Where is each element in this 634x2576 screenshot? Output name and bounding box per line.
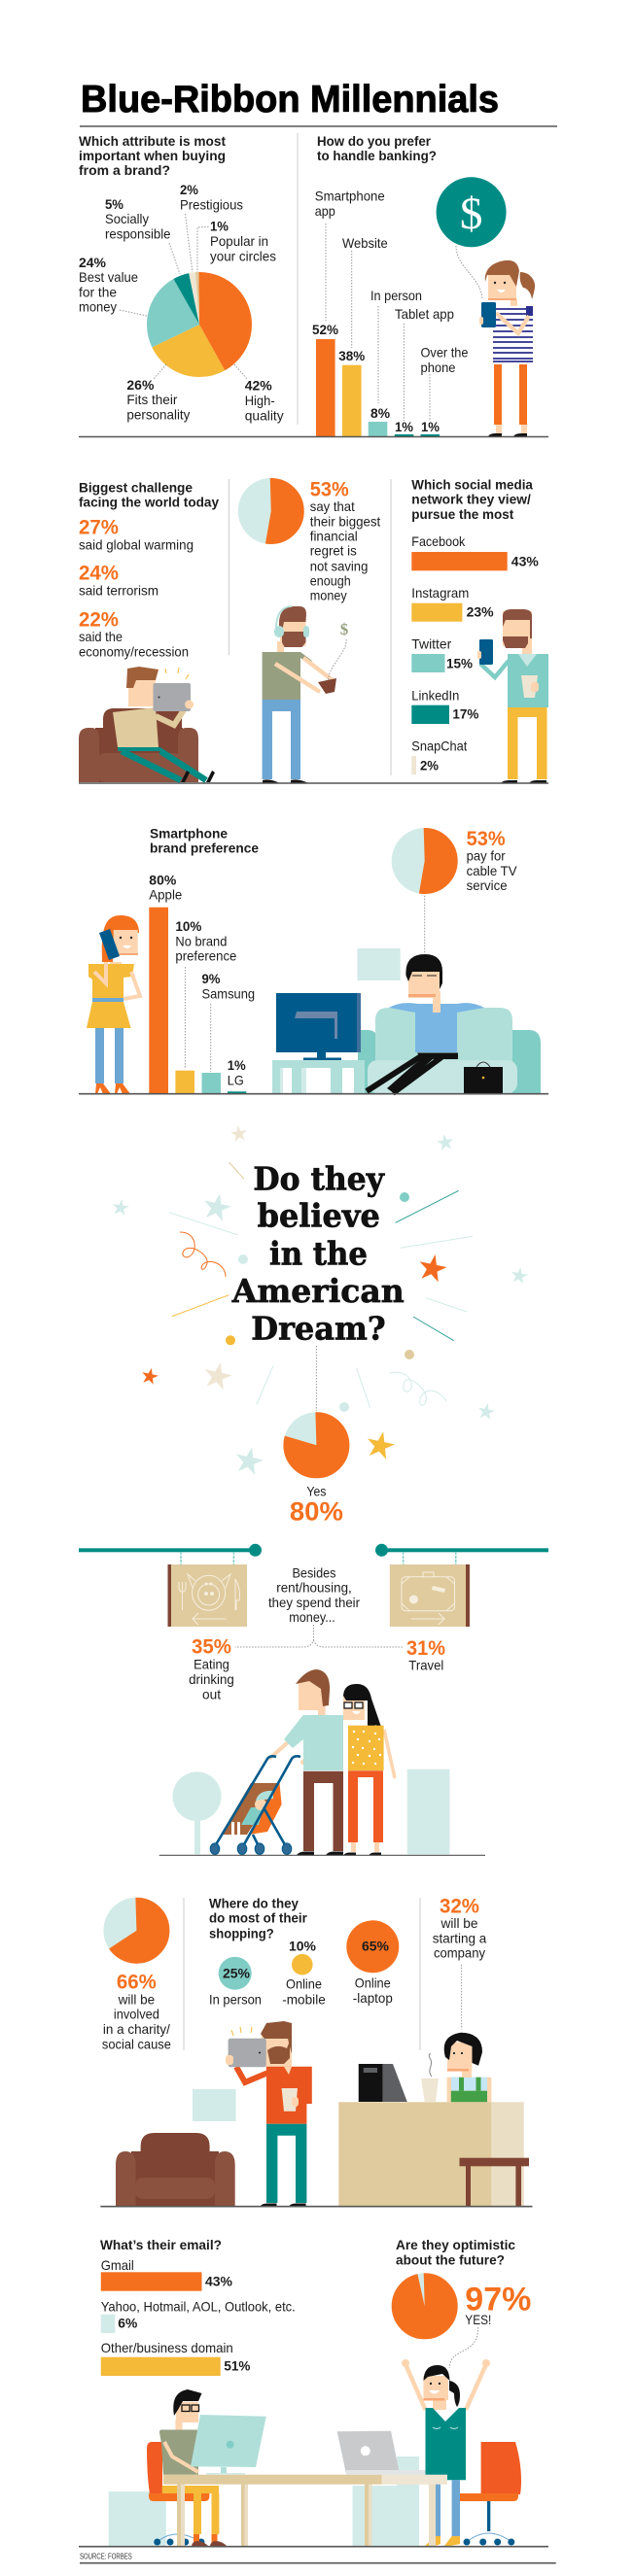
pie labels: Best value xyxy=(79,269,138,285)
text block: charity: social cause xyxy=(102,2036,171,2051)
text block: regret: their biggest xyxy=(310,514,380,530)
heading: American Dream: believe xyxy=(258,1197,380,1235)
bar chart: banking: phone xyxy=(420,360,456,375)
text block: charity: will be xyxy=(118,1991,155,2007)
pie labels: quality xyxy=(245,407,284,423)
heading: American Dream: American xyxy=(231,1272,405,1310)
panel: charity xyxy=(102,1898,171,2051)
figure: girl on phone xyxy=(87,915,140,1094)
bar chart: banking: Over the xyxy=(420,345,469,361)
panel: starting a company: starting a xyxy=(433,1930,486,1945)
bar chart: email: Other/business domain xyxy=(101,2340,233,2355)
heading: smartphone brand: Smartphone xyxy=(150,825,228,841)
label: 97% yes xyxy=(449,2281,531,2368)
pie labels: 1% xyxy=(210,219,229,234)
pie chart: 66% charity xyxy=(103,1898,169,1964)
bubble chart: shopping: In person xyxy=(209,1991,262,2007)
bar chart: banking: 8% xyxy=(370,405,391,421)
heading: brand attributes: Which attribute is most xyxy=(79,133,226,149)
bar chart: banking xyxy=(312,189,469,436)
label: 80% yes: Yes xyxy=(306,1483,326,1498)
pie labels: for the xyxy=(79,284,117,299)
bubble chart: shopping xyxy=(209,1920,399,2007)
panel: shopping xyxy=(116,1896,529,2208)
pie labels: Prestigious xyxy=(180,197,243,213)
icon: travel sign xyxy=(390,1564,470,1627)
panel: starting a company: company xyxy=(434,1945,485,1961)
bar chart: social networks: 2% xyxy=(420,758,440,773)
bar chart: smartphone brands: Samsung xyxy=(202,986,255,1002)
bar chart: smartphone brands: LG xyxy=(228,1073,244,1088)
pie labels: your circles xyxy=(210,249,276,264)
bar chart: smartphone brands: 10% xyxy=(175,918,202,934)
heading: American Dream: Dream? xyxy=(251,1309,386,1347)
label: 97% yes: YES! xyxy=(465,2312,491,2327)
bar chart: social networks xyxy=(411,533,539,774)
text block: cable: 53% xyxy=(467,828,506,850)
bubble chart: shopping: 25% xyxy=(223,1965,251,1980)
heading: social media xyxy=(411,476,533,522)
sign rods xyxy=(79,1544,548,1564)
text block: challenges: 24% xyxy=(79,563,119,585)
bar chart: social networks: 43% xyxy=(511,553,539,568)
text block: regret: enough xyxy=(310,573,351,589)
heading: optimism xyxy=(396,2237,515,2267)
icon: eating sign xyxy=(167,1564,247,1627)
pie labels: responsible xyxy=(105,225,171,241)
bubble chart: shopping: Online xyxy=(286,1976,322,1992)
heading: smartphone brand xyxy=(150,825,259,856)
text block: cable: pay for xyxy=(467,848,506,864)
pie chart: 53% regret xyxy=(238,478,304,544)
text block: challenges: 27% xyxy=(79,516,119,538)
pie labels: High- xyxy=(245,393,275,408)
bar chart: social networks: 23% xyxy=(467,603,494,619)
figure: man with headphones and wallet: $ xyxy=(340,620,349,638)
text block: spending: rent/housing, xyxy=(276,1579,352,1595)
heading: American Dream: Do they xyxy=(253,1159,385,1197)
bar chart: smartphone brands: 9% xyxy=(202,971,221,986)
pie labels: Fits their xyxy=(126,392,178,407)
bar chart: banking: In person xyxy=(370,288,422,303)
panel: starting a company: will be xyxy=(440,1915,478,1931)
figure: man with tablet and coffee xyxy=(226,2021,312,2206)
text block: regret: money xyxy=(310,588,347,603)
title: Blue-Ribbon Millennials xyxy=(81,79,499,120)
text block: charity: 66% xyxy=(117,1972,157,1994)
text block: spending: Travel xyxy=(408,1658,443,1673)
text block: challenges xyxy=(79,480,219,659)
text block: spending: out xyxy=(202,1686,221,1701)
figure: man on armchair with tablet xyxy=(79,667,215,782)
pie labels: Socially xyxy=(105,211,149,226)
pie labels: 2% xyxy=(180,182,199,197)
text block: charity: involved xyxy=(114,2006,159,2021)
pie labels: 42% xyxy=(245,378,272,394)
text block: spending: Eating xyxy=(194,1657,229,1672)
heading: brand attributes xyxy=(79,133,226,178)
heading: optimism: Are they optimistic xyxy=(396,2237,515,2252)
text block: cable: service xyxy=(467,877,508,893)
text block: regret: say that xyxy=(310,498,355,514)
bar chart: social networks: SnapChat xyxy=(411,738,467,753)
heading: banking: How do you prefer xyxy=(317,133,432,149)
figure: man with headphones and wallet xyxy=(263,606,349,783)
figure: counter with barista xyxy=(338,2033,529,2207)
bar chart: banking: app xyxy=(315,203,335,219)
pie labels: Popular in xyxy=(210,233,268,249)
bar chart: social networks: LinkedIn xyxy=(411,688,459,704)
pie labels xyxy=(79,182,284,423)
panel: financial regret xyxy=(238,478,380,783)
bar chart: social networks: Twitter xyxy=(411,636,452,652)
confetti decoration xyxy=(112,1124,529,1476)
heading: social media: pursue the most xyxy=(411,506,514,522)
panel: social media xyxy=(411,476,548,783)
text block: spending xyxy=(189,1564,445,1701)
panel: biggest challenge xyxy=(79,480,219,782)
figure: man on sofa with TV xyxy=(272,954,541,1094)
figure: desk xyxy=(163,2456,447,2546)
figure: cheering woman with laptop xyxy=(337,2359,490,2546)
icon: dollar balloon: $ xyxy=(460,189,482,239)
figure: armchair xyxy=(116,2133,235,2208)
bar chart: banking: Smartphone xyxy=(315,189,385,204)
heading: social media: Which social media xyxy=(411,476,533,492)
text block: cable xyxy=(467,828,517,893)
panel: banking preference xyxy=(312,133,535,436)
bar chart: banking: 1% xyxy=(421,419,440,434)
text block: regret: financial xyxy=(310,529,358,544)
heading: shopping: do most of their xyxy=(209,1910,307,1926)
pie labels: money xyxy=(79,299,117,315)
text block: spending: 31% xyxy=(406,1637,445,1660)
panel: optimism xyxy=(337,2237,531,2546)
figure: desk top and office chair xyxy=(381,2442,521,2546)
bar chart: social networks: Instagram xyxy=(411,585,469,601)
panel: brand attributes xyxy=(79,133,284,423)
text block: regret: 53% xyxy=(310,479,349,501)
bubble chart: shopping: 65% xyxy=(362,1939,390,1954)
figure: family with stroller xyxy=(173,1669,449,1856)
bar chart: smartphone brands: Apple xyxy=(149,887,182,903)
bubble chart: shopping: Online xyxy=(355,1975,391,1991)
text block: challenges: economy/recession xyxy=(79,643,189,659)
bar chart: banking: 52% xyxy=(312,322,339,337)
text block: challenges: 22% xyxy=(79,608,119,631)
heading: smartphone brand: brand preference xyxy=(150,841,259,856)
bar chart: email: 6% xyxy=(118,2316,138,2331)
text block: challenges: said terrorism xyxy=(79,583,158,599)
bar chart: smartphone brands: No brand xyxy=(175,933,227,948)
bar chart: email: Yahoo, Hotmail, AOL, Outlook, etc. xyxy=(101,2299,296,2315)
text block: regret: not saving xyxy=(310,558,368,573)
bar chart: email: What’s their email? xyxy=(100,2237,222,2252)
bar chart: email: Gmail xyxy=(101,2257,134,2273)
bar chart: banking: 38% xyxy=(338,348,366,363)
bar chart: social networks: 15% xyxy=(446,655,474,670)
text block: cable: cable TV xyxy=(467,863,517,878)
panel: cable TV xyxy=(272,828,541,1094)
bar chart: smartphone brands xyxy=(149,872,255,1094)
bar chart: smartphone brands: 80% xyxy=(149,872,177,887)
heading: banking xyxy=(317,133,437,163)
bubble chart: shopping: 10% xyxy=(289,1939,317,1954)
pie chart: 97% yes xyxy=(392,2273,458,2339)
figure: man at desk with monitor xyxy=(109,2389,266,2546)
bar chart: social networks: Facebook xyxy=(411,533,466,549)
bar chart: banking: 1% xyxy=(395,419,414,434)
pie chart: brand attributes xyxy=(173,298,226,351)
text block: spending: Besides xyxy=(292,1564,336,1580)
text block: challenges: facing the world today xyxy=(79,495,219,510)
bar chart: social networks: 17% xyxy=(452,706,479,722)
label: 97% yes: 97% xyxy=(465,2281,531,2318)
text block: charity xyxy=(102,1972,171,2051)
source note: SOURCE: FORBES xyxy=(80,2553,132,2561)
text block: challenges: Biggest challenge xyxy=(79,480,193,496)
panel: starting a company: 32% xyxy=(440,1895,479,1917)
pie labels: 24% xyxy=(79,255,107,270)
text block: regret: regret is xyxy=(310,543,357,559)
bar chart: email: 43% xyxy=(205,2273,233,2288)
heading: shopping: Where do they xyxy=(209,1896,299,1911)
bar chart: email xyxy=(100,2237,296,2376)
figure: girl with phone xyxy=(479,260,535,436)
pie labels: 5% xyxy=(105,196,124,212)
text block: spending: money... xyxy=(289,1609,335,1625)
panel: American Dream xyxy=(112,1124,529,1526)
bubble chart: shopping: -laptop xyxy=(353,1990,393,2006)
text block: regret xyxy=(310,479,380,603)
pie chart: 80% yes xyxy=(283,1412,349,1478)
text block: charity: in a charity/ xyxy=(103,2021,170,2037)
heading: American Dream: in the xyxy=(269,1235,368,1273)
panel: spending xyxy=(79,1544,548,1856)
bar chart: banking: Tablet app xyxy=(395,306,454,322)
panel: starting a company xyxy=(433,1895,486,2029)
label: 80% yes xyxy=(290,1483,343,1526)
bubble chart: shopping: -mobile xyxy=(282,1991,326,2007)
heading: American Dream xyxy=(231,1159,405,1347)
pie labels: 26% xyxy=(126,377,155,393)
label: 80% yes: 80% xyxy=(290,1496,343,1526)
icon: dollar balloon xyxy=(437,177,507,298)
text block: challenges: said global warming xyxy=(79,536,194,552)
heading: shopping xyxy=(209,1896,307,1941)
text block: spending: 35% xyxy=(192,1636,231,1659)
heading: banking: to handle banking? xyxy=(317,148,437,163)
bar chart: smartphone brands: 1% xyxy=(228,1057,246,1073)
panel: email xyxy=(100,2237,447,2546)
heading: brand attributes: from a brand? xyxy=(79,162,170,178)
heading: shopping: shopping? xyxy=(209,1925,274,1941)
heading: brand attributes: important when buying xyxy=(79,148,226,163)
bar chart: email: 51% xyxy=(224,2358,251,2374)
text block: spending: drinking xyxy=(189,1671,234,1687)
heading: optimism: about the future? xyxy=(396,2251,505,2267)
text block: challenges: said the xyxy=(79,629,123,644)
pie chart: 53% cable xyxy=(392,828,458,894)
pie labels: personality xyxy=(126,406,190,422)
text block: spending: they spend their xyxy=(268,1595,360,1610)
bar chart: smartphone brands: preference xyxy=(175,948,237,964)
bar chart: banking: Website xyxy=(342,235,388,251)
heading: social media: network they view/ xyxy=(411,492,531,507)
figure: man with phone and coffee xyxy=(477,609,548,783)
panel: smartphone brand preference xyxy=(87,825,259,1094)
